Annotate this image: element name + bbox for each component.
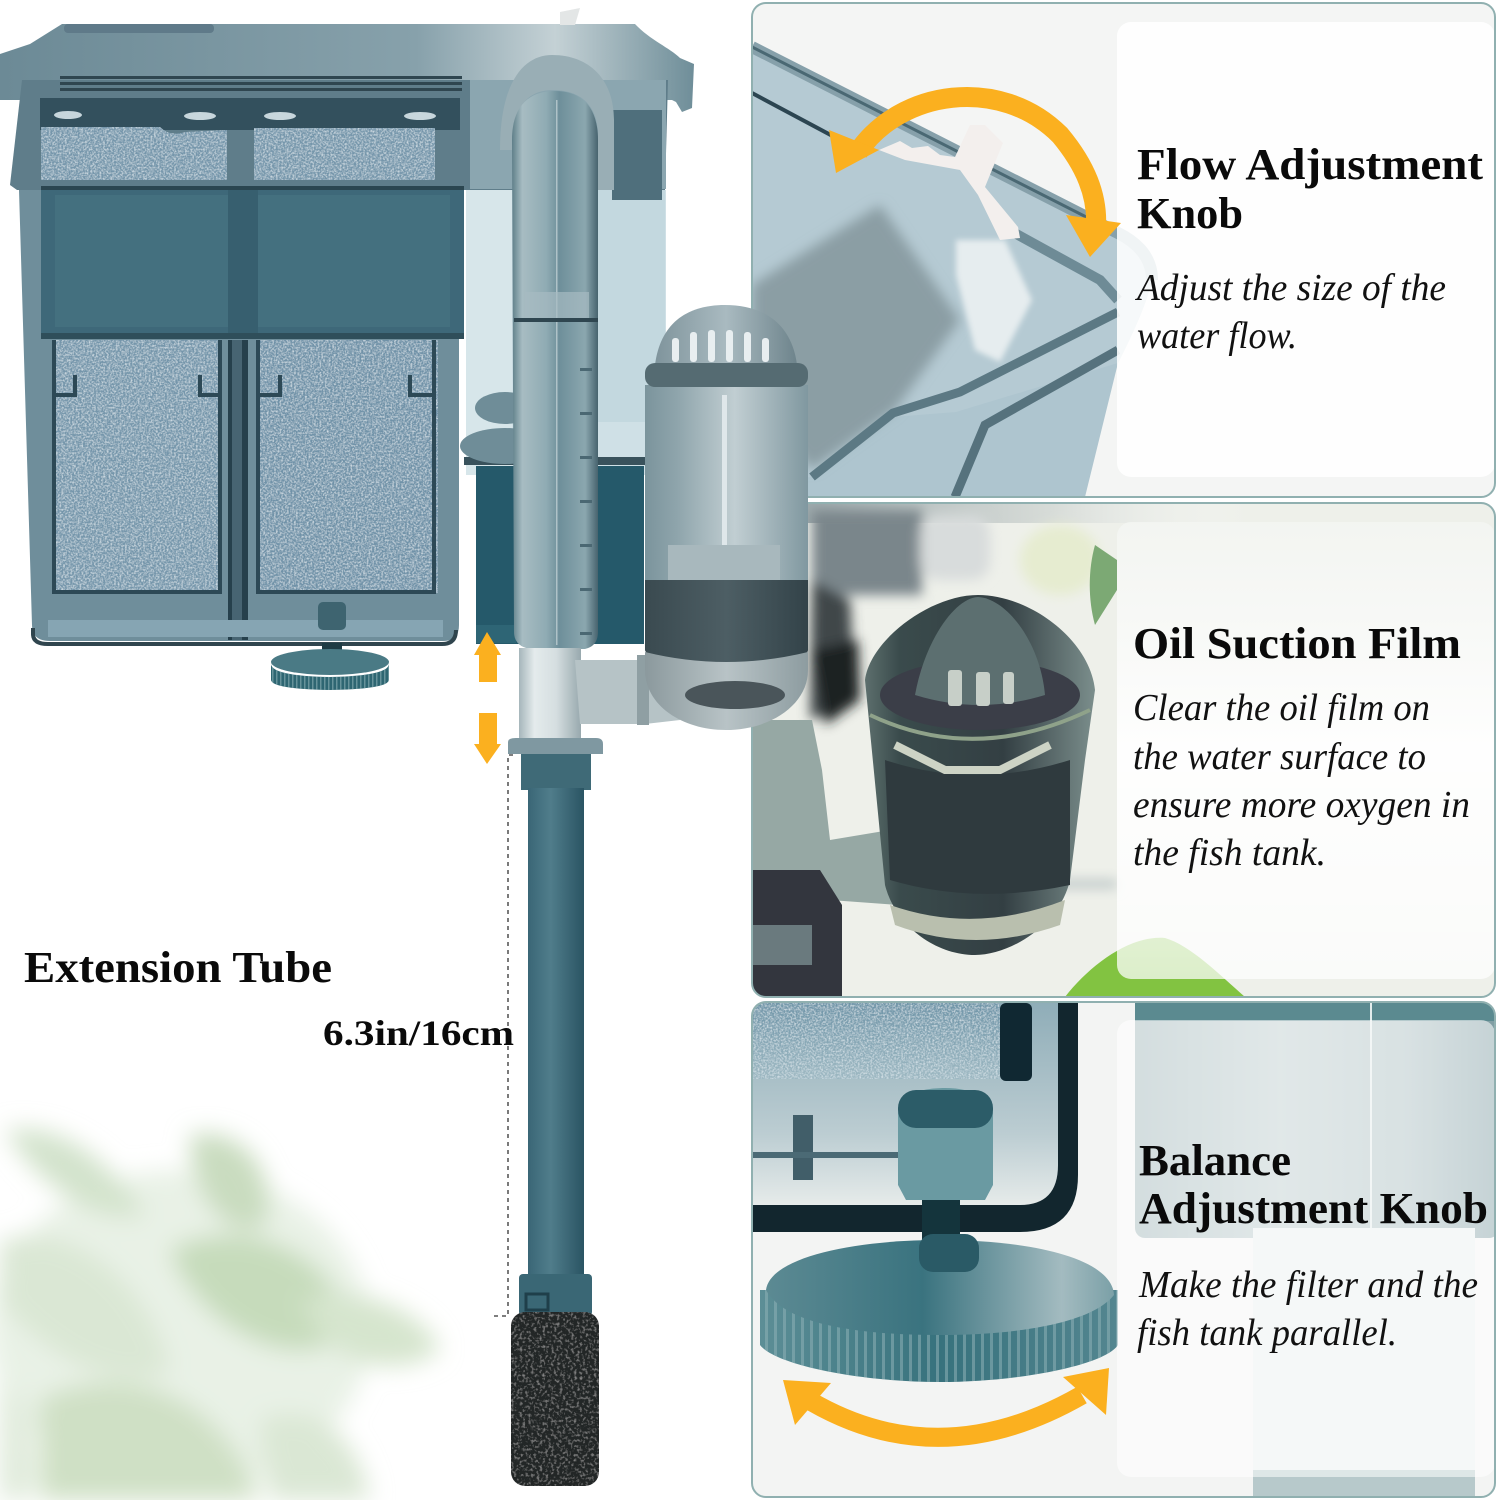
pipe hood (500, 55, 614, 190)
right tank section (460, 190, 666, 644)
cylinder top sponge (880, 666, 1080, 728)
text: flow adjustment: Flow Adjustment (1137, 140, 1483, 189)
extension tube (511, 754, 599, 1486)
frame notch (1000, 1003, 1032, 1081)
background cylinder (1135, 1003, 1499, 1238)
text: balance adjustment: Adjustment Knob (1139, 1184, 1488, 1233)
pipe left (752, 720, 898, 905)
white knob (879, 141, 1020, 240)
text: flow adjustment: Adjust the size of the (1134, 267, 1446, 309)
text: balance adjustment: Make the filter and the (1138, 1264, 1478, 1306)
lower connector (752, 925, 812, 965)
label: extension tube: Extension Tube (24, 943, 332, 992)
top haze (808, 504, 1116, 523)
ring highlights (870, 710, 1090, 739)
stem cap (898, 1088, 993, 1200)
panel border (752, 3, 1495, 497)
centre rod (722, 395, 727, 545)
interior shadow (752, 205, 960, 470)
cylinder core (885, 760, 1070, 894)
arrow up (474, 632, 501, 682)
intake pipe (512, 91, 598, 649)
lid rim lines (752, 47, 1152, 280)
lower right sponge (258, 340, 438, 593)
hang-on filter (0, 8, 694, 754)
body knob stem (318, 602, 346, 630)
text: oil suction: the fish tank. (1133, 832, 1326, 874)
elbow connector (575, 660, 680, 724)
clear lower pipe (519, 648, 581, 743)
connector clips (526, 1294, 548, 1310)
text: flow adjustment: Knob (1137, 189, 1243, 238)
blurred plant decoration (0, 1128, 440, 1500)
text: balance adjustment: Balance (1139, 1136, 1291, 1185)
bowl (645, 652, 808, 730)
green leaf bottom (1065, 938, 1245, 997)
large knob (760, 1234, 1118, 1382)
text card (1117, 1020, 1495, 1477)
pipe scale marks (580, 368, 592, 635)
filter box interior (752, 1003, 1058, 1205)
collar (508, 738, 603, 754)
tank corner (808, 363, 1118, 496)
knob tab (560, 8, 580, 25)
filter main body (19, 190, 459, 641)
sponge detail (752, 1003, 1000, 1079)
panel border (752, 1002, 1495, 1497)
charcoal (685, 681, 785, 709)
text: oil suction: the water surface to (1133, 736, 1426, 778)
lower cylinder (1253, 1228, 1475, 1238)
cage slots (948, 670, 1014, 706)
adjustment knob small (271, 649, 389, 690)
cage dome (915, 597, 1045, 705)
filter lid (0, 24, 694, 112)
upper connector (521, 754, 591, 790)
sponge frames (54, 340, 434, 592)
arrow down (474, 713, 501, 764)
tube body (528, 788, 584, 1276)
text: flow adjustment (1134, 140, 1483, 357)
skimmer collar (645, 363, 808, 387)
text card (1117, 522, 1495, 979)
text: oil suction: Clear the oil film on (1133, 687, 1430, 729)
front window (41, 188, 464, 336)
leaf top (1090, 545, 1117, 625)
sponge bottom (752, 870, 842, 997)
water line band (890, 900, 1065, 940)
label: length: 6.3in/16cm (323, 1013, 514, 1053)
text: oil suction (1133, 619, 1470, 874)
dark ring (645, 580, 808, 665)
lower left sponge (53, 340, 220, 593)
panel border (752, 503, 1495, 997)
panel: oil suction (752, 503, 1495, 997)
inner cup (668, 545, 780, 580)
text card (1117, 22, 1495, 477)
sponge tip (511, 1312, 599, 1486)
sponge dark slots (54, 111, 436, 120)
lid label strip (64, 24, 214, 33)
rotation arrow (783, 1368, 1109, 1437)
text: balance adjustment (1137, 1136, 1488, 1354)
skimmer (575, 305, 808, 730)
skimmer dome (655, 305, 797, 365)
dome slots (672, 330, 769, 362)
upper body band (10, 80, 668, 190)
skimmer body (645, 385, 808, 585)
white sponge streak (956, 240, 1032, 362)
lower connector (519, 1274, 592, 1316)
elbow flange (637, 655, 649, 725)
rotation arrow (829, 97, 1121, 257)
body outline (33, 628, 456, 644)
panel: flow adjustment (752, 3, 1495, 497)
background blurs (801, 504, 1117, 894)
text: flow adjustment: water flow. (1137, 315, 1297, 357)
text: oil suction: Oil Suction Film (1133, 619, 1461, 668)
dimension line (490, 755, 513, 1316)
filter box frame (752, 1003, 1078, 1232)
body bottom edge (48, 620, 443, 637)
knob stem (922, 1200, 960, 1240)
small post (793, 1115, 813, 1180)
pipe seam (556, 100, 558, 645)
center divider (228, 340, 248, 640)
text: balance adjustment: fish tank parallel. (1137, 1312, 1397, 1354)
top sponges (41, 127, 435, 180)
panel: balance adjustment (752, 1002, 1499, 1497)
text: oil suction: ensure more oxygen in (1133, 784, 1470, 826)
skimmer cylinder (865, 595, 1095, 955)
tank rim panel (752, 47, 1152, 480)
